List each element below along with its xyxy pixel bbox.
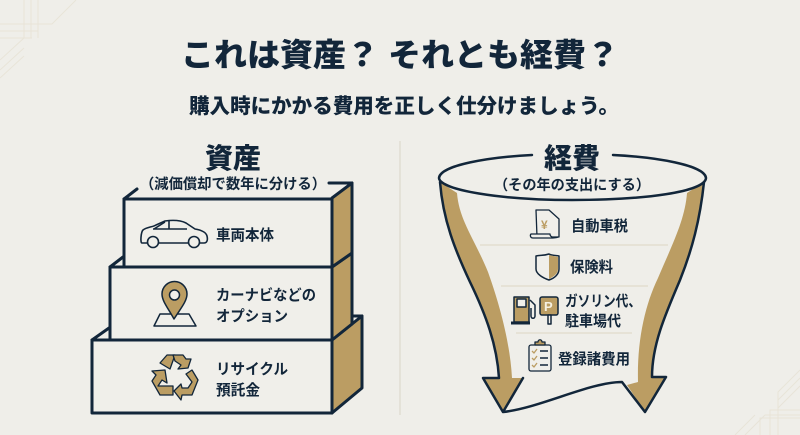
label: recycling deposit: リサイクル (216, 361, 288, 378)
label: navigation options: カーナビなどの (216, 286, 316, 304)
heading: expenses: 経費 (544, 143, 600, 174)
icon: tax document: ¥ (541, 218, 548, 232)
icon: fuel pump and parking sign (511, 297, 558, 324)
label: insurance: 保険料 (570, 258, 613, 276)
box: middle tier (110, 253, 352, 340)
panel: assets stacked boxes (92, 143, 362, 413)
funnel left band with arrow (440, 182, 523, 412)
funnel outline (439, 155, 706, 412)
label: automobile tax: 自動車税 (571, 217, 628, 235)
icon: clipboard checklist (529, 340, 551, 371)
label: navigation options: オプション (216, 308, 288, 325)
icon: map pin (154, 281, 196, 326)
label: gasoline and parking: ガソリン代、 (565, 293, 641, 310)
expenses subheading: （その年の支出にする） (494, 176, 650, 194)
label: recycling deposit: 預託金 (216, 381, 260, 399)
divider (399, 141, 401, 415)
subtitle: 購入時にかかる費用を正しく仕分けましょう。 (189, 94, 619, 118)
box: top tier (124, 183, 352, 267)
assets subheading: （減価償却で数年に分ける） (140, 175, 326, 193)
title: これは資産？ それとも経費？ (181, 37, 619, 73)
item dividers (480, 245, 668, 333)
icon: recycle (152, 355, 198, 400)
icon: shield (536, 254, 559, 280)
heading: assets: 資産 (205, 143, 261, 174)
icon: fuel pump and parking sign: P (544, 299, 553, 314)
icon: car (141, 220, 207, 248)
panel: expenses funnel (439, 143, 706, 412)
box: bottom tier (92, 316, 362, 413)
label: gasoline and parking: 駐車場代 (565, 312, 621, 330)
label: vehicle body: 車両本体 (216, 227, 274, 244)
icon: tax document (530, 210, 559, 238)
label: registration fees: 登録諸費用 (558, 350, 630, 368)
funnel right band with arrow (627, 182, 704, 412)
